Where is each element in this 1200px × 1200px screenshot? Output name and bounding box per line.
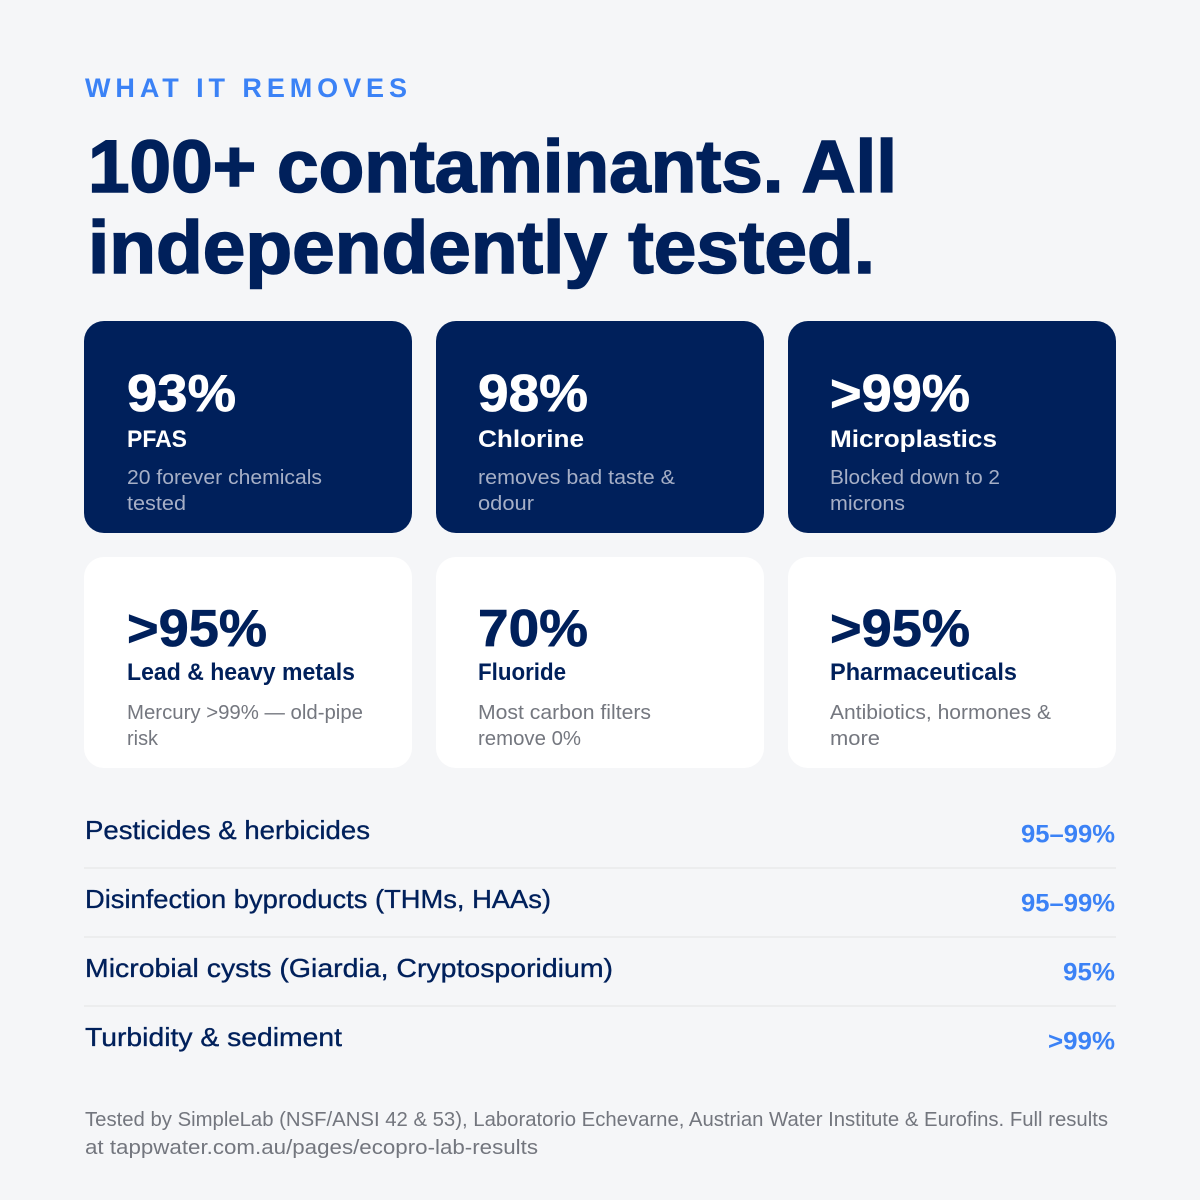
- panel: Fluoride: 70%: [478, 600, 588, 658]
- panel: Chlorine: odour: [478, 493, 534, 515]
- panel: PFAS: [84, 321, 412, 533]
- title: 100+ contaminants. All: [88, 125, 897, 208]
- panel: Lead and heavy metals: Lead & heavy metals: [127, 659, 355, 686]
- list row: turbidity: [85, 1022, 1115, 1056]
- list row: turbidity: Turbidity & sediment: [85, 1022, 343, 1052]
- list row: pesticides: [85, 815, 1115, 848]
- panel: Chlorine: removes bad taste &: [478, 467, 676, 489]
- panel: Microplastics: Blocked down to 2: [830, 467, 1000, 489]
- panel: Pharmaceuticals: >95%: [830, 600, 970, 658]
- panel: Pharmaceuticals: more: [830, 728, 880, 750]
- eyebrow heading: WHAT IT REMOVES: [85, 73, 407, 103]
- panel: PFAS: tested: [127, 493, 186, 515]
- panel: Pharmaceuticals: Pharmaceuticals: [830, 659, 1017, 686]
- footer note: Tested by SimpleLab (NSF/ANSI 42 & 53), Laboratorio Echevarne, Austrian Water Institute & Eurofins. Full results: [85, 1109, 1108, 1131]
- list row: turbidity: >99%: [1048, 1028, 1115, 1056]
- panel: PFAS: 20 forever chemicals: [127, 467, 322, 489]
- footer note: at tappwater.com.au/pages/ecopro-lab-results: [85, 1137, 538, 1159]
- panel: Lead and heavy metals: risk: [127, 728, 159, 750]
- panel: Fluoride: Most carbon filters: [478, 702, 651, 724]
- title: independently tested.: [88, 206, 875, 289]
- panel: PFAS: 93%: [127, 365, 236, 423]
- panel: Fluoride: Fluoride: [478, 659, 566, 686]
- panel: Chlorine: 98%: [478, 365, 588, 423]
- list row: microbial cysts: [85, 953, 1115, 986]
- panel: Lead and heavy metals: >95%: [127, 600, 267, 658]
- panel: Microplastics: [788, 321, 1116, 533]
- panel: Lead and heavy metals: Mercury >99% — old-pipe: [127, 702, 363, 724]
- list row: microbial cysts: 95%: [1063, 958, 1115, 986]
- panel: Microplastics: microns: [830, 493, 905, 515]
- panel: Chlorine: [436, 321, 764, 533]
- panel: Pharmaceuticals: [788, 557, 1116, 768]
- list row: microbial cysts: Microbial cysts (Giardia, Cryptosporidium): [85, 953, 613, 983]
- list row: pesticides: Pesticides & herbicides: [85, 815, 370, 845]
- panel: Fluoride: remove 0%: [478, 728, 581, 750]
- panel: Microplastics: Microplastics: [830, 426, 997, 453]
- panel: Chlorine: Chlorine: [478, 426, 584, 453]
- title: [88, 125, 897, 289]
- panel: Pharmaceuticals: Antibiotics, hormones &: [830, 702, 1052, 724]
- panel: Fluoride: [436, 557, 764, 768]
- panel: Microplastics: >99%: [830, 365, 970, 423]
- panel: Lead and heavy metals: [84, 557, 412, 768]
- list row: disinfection byproducts: Disinfection byproducts (THMs, HAAs): [85, 884, 551, 914]
- list row: disinfection byproducts: 95–99%: [1021, 890, 1115, 918]
- list row: pesticides: 95–99%: [1021, 820, 1115, 848]
- footer note: [85, 1109, 1108, 1159]
- panel: PFAS: PFAS: [127, 426, 187, 453]
- list row: disinfection byproducts: [85, 884, 1115, 918]
